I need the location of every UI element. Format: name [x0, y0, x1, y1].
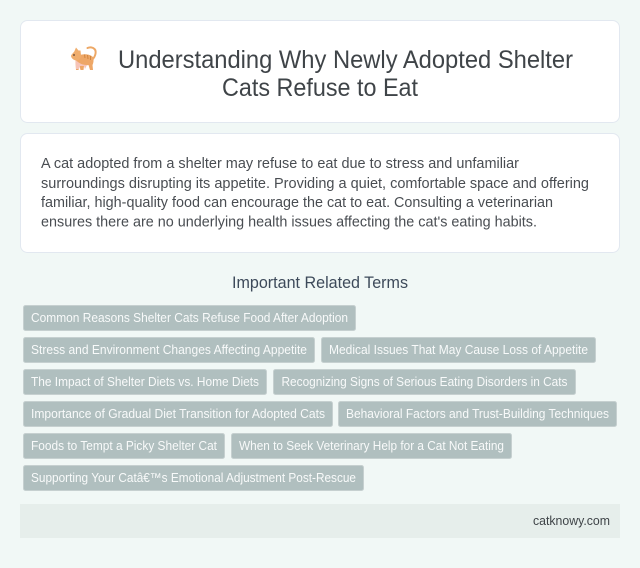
- tag: eating disorders: Recognizing Signs of Serious Eating Disorders in Cats: [282, 375, 568, 389]
- tag: medical issues: Medical Issues That May Cause Loss of Appetite: [329, 343, 588, 357]
- tag: picky cat foods: [24, 434, 224, 458]
- tag: emotional adjustment: [24, 466, 364, 490]
- tag: gradual diet transition: Importance of Gradual Diet Transition for Adopted Cats: [31, 407, 325, 421]
- heading: related terms: Important Related Terms: [232, 274, 408, 292]
- tag: behavioral factors: [338, 402, 616, 426]
- tag: shelter diets: [24, 370, 266, 394]
- summary text: ensures there are no underlying health issues affecting the cat's eating habits.: [41, 214, 537, 230]
- title: [118, 46, 573, 102]
- panel: title card: [20, 20, 620, 122]
- summary text: A cat adopted from a shelter may refuse to eat due to stress and unfamiliar: [41, 155, 519, 172]
- title: Understanding Why Newly Adopted Shelter: [118, 46, 573, 74]
- tag: emotional adjustment: Supporting Your Catâ€™s Emotional Adjustment Post-Rescue: [31, 471, 356, 485]
- tag: veterinary help: When to Seek Veterinary Help for a Cat Not Eating: [239, 439, 504, 453]
- footer source: catknowy.com: [533, 514, 610, 528]
- panel: related term tags: [24, 306, 616, 490]
- tag: stress and environment: [24, 338, 314, 362]
- panel: summary card: [20, 134, 620, 252]
- summary text: surroundings disrupting its appetite. Providing a quiet, comfortable space and offering: [41, 175, 589, 192]
- tag: behavioral factors: Behavioral Factors and Trust-Building Techniques: [346, 407, 609, 421]
- summary text: familiar, high-quality food can encourage the cat to eat. Consulting a veterinarian: [41, 194, 553, 211]
- footer bar: [20, 504, 620, 538]
- tag: shelter diets: The Impact of Shelter Diets vs. Home Diets: [31, 375, 259, 389]
- tag: veterinary help: [232, 434, 512, 458]
- summary text: [41, 155, 589, 230]
- tag: picky cat foods: Foods to Tempt a Picky Shelter Cat: [31, 439, 217, 453]
- tag: gradual diet transition: [24, 402, 332, 426]
- tag: common reasons: [24, 306, 356, 330]
- tag: stress and environment: Stress and Environment Changes Affecting Appetite: [31, 343, 307, 357]
- tag: medical issues: [322, 338, 596, 362]
- icon: orange cat: [71, 47, 96, 70]
- title: Cats Refuse to Eat: [222, 74, 418, 102]
- tag: eating disorders: [274, 370, 576, 394]
- tag: common reasons: Common Reasons Shelter Cats Refuse Food After Adoption: [31, 311, 348, 325]
